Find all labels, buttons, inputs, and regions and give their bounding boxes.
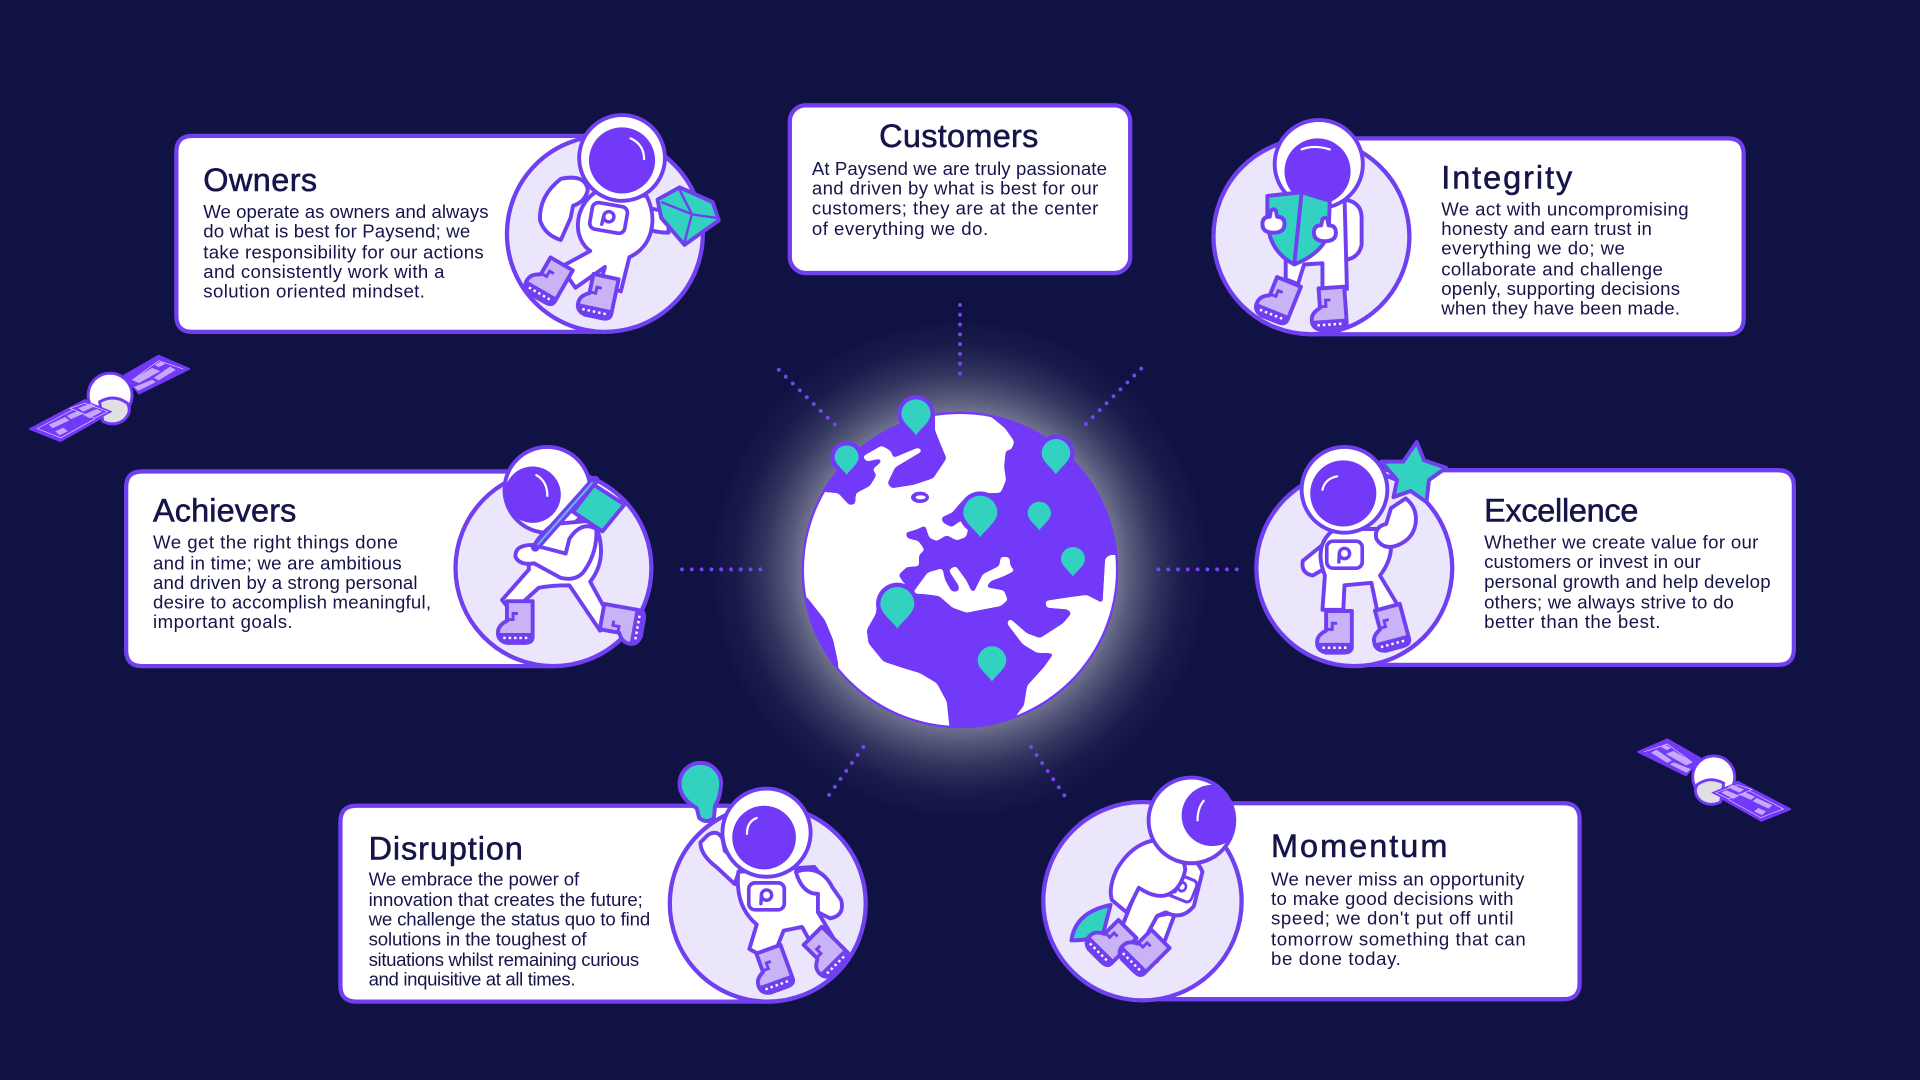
text: excellence: others; we always strive to do — [1484, 592, 1734, 613]
text: excellence: personal growth and help develop — [1484, 571, 1771, 592]
icon: astronaut with lightbulb — [680, 763, 851, 996]
panel: excellence — [1256, 442, 1794, 666]
text: achievers: and driven by a strong personal — [153, 572, 418, 593]
text: integrity: collaborate and challenge — [1441, 259, 1663, 280]
text: achievers: We get the right things done — [153, 532, 398, 553]
text: owners: solution oriented mindset. — [203, 281, 425, 302]
heading: excellence: Excellence — [1484, 493, 1638, 529]
text: achievers: important goals. — [153, 611, 293, 632]
text: disruption: solutions in the toughest of — [369, 928, 587, 949]
text: owners: do what is best for Paysend; we — [203, 221, 470, 242]
text: achievers — [153, 532, 431, 632]
text: customers: At Paysend we are truly passionate — [812, 158, 1107, 179]
text: customers: and driven by what is best for our — [812, 178, 1098, 199]
text: disruption: innovation that creates the future; — [369, 889, 643, 910]
text: customers: customers; they are at the center — [812, 197, 1098, 218]
connector dots around the globe — [682, 305, 1238, 802]
panel: owners — [176, 115, 719, 332]
text: achievers: and in time; we are ambitious — [153, 552, 402, 573]
panel: achievers — [126, 447, 651, 666]
text: momentum: tomorrow something that can — [1271, 928, 1526, 949]
text: achievers: desire to accomplish meaningful, — [153, 592, 431, 613]
icon: astronaut with shield — [1253, 120, 1363, 331]
panel: integrity — [1213, 120, 1744, 334]
text: momentum: speed; we don't put off until — [1271, 907, 1513, 928]
text: customers — [812, 158, 1107, 239]
map pins — [830, 395, 1085, 681]
text: excellence: better than the best. — [1484, 611, 1660, 632]
icon: astronaut with diamond — [522, 115, 719, 320]
text: integrity: honesty and earn trust in — [1441, 218, 1652, 239]
text: momentum: to make good decisions with — [1271, 888, 1513, 909]
globe glow — [709, 318, 1211, 820]
text: owners — [203, 201, 489, 302]
satellite: right — [1638, 739, 1790, 821]
text: disruption: we challenge the status quo to find — [368, 909, 650, 930]
heading: owners: Owners — [203, 162, 317, 198]
text: integrity: We act with uncompromising — [1441, 199, 1689, 220]
heading: customers: Customers — [879, 118, 1038, 154]
icon: astronaut with flag — [498, 447, 645, 645]
text: disruption: situations whilst remaining curious — [369, 949, 639, 970]
text: excellence — [1484, 532, 1771, 632]
text: integrity: when they have been made. — [1440, 298, 1680, 319]
text: excellence: customers or invest in our — [1484, 551, 1701, 572]
heading: achievers: Achievers — [153, 493, 296, 529]
icon: astronaut with star — [1302, 442, 1446, 653]
heading: disruption: Disruption — [369, 831, 523, 867]
text: owners: We operate as owners and always — [203, 201, 489, 222]
panel: momentum — [1043, 778, 1580, 1000]
text: owners: take responsibility for our actions — [203, 241, 484, 262]
panel: customers — [790, 105, 1130, 273]
heading: momentum: Momentum — [1271, 828, 1447, 864]
text: owners: and consistently work with a — [203, 261, 445, 282]
text: momentum: be done today. — [1271, 948, 1401, 969]
text: disruption: and inquisitive at all times. — [369, 969, 576, 990]
text: disruption: We embrace the power of — [369, 868, 580, 889]
text: momentum: We never miss an opportunity — [1271, 868, 1525, 889]
satellite: left — [30, 356, 189, 441]
globe — [797, 395, 1123, 733]
text: excellence: Whether we create value for our — [1484, 532, 1758, 553]
panel: disruption — [340, 763, 866, 1002]
text: integrity — [1440, 199, 1689, 319]
text: customers: of everything we do. — [812, 218, 988, 239]
text: integrity: openly, supporting decisions — [1441, 278, 1680, 299]
text: disruption — [368, 868, 650, 990]
text: integrity: everything we do; we — [1441, 238, 1625, 259]
icon: astronaut with rocket flame — [1071, 778, 1243, 977]
text: momentum — [1271, 868, 1526, 969]
heading: integrity: Integrity — [1441, 160, 1573, 196]
